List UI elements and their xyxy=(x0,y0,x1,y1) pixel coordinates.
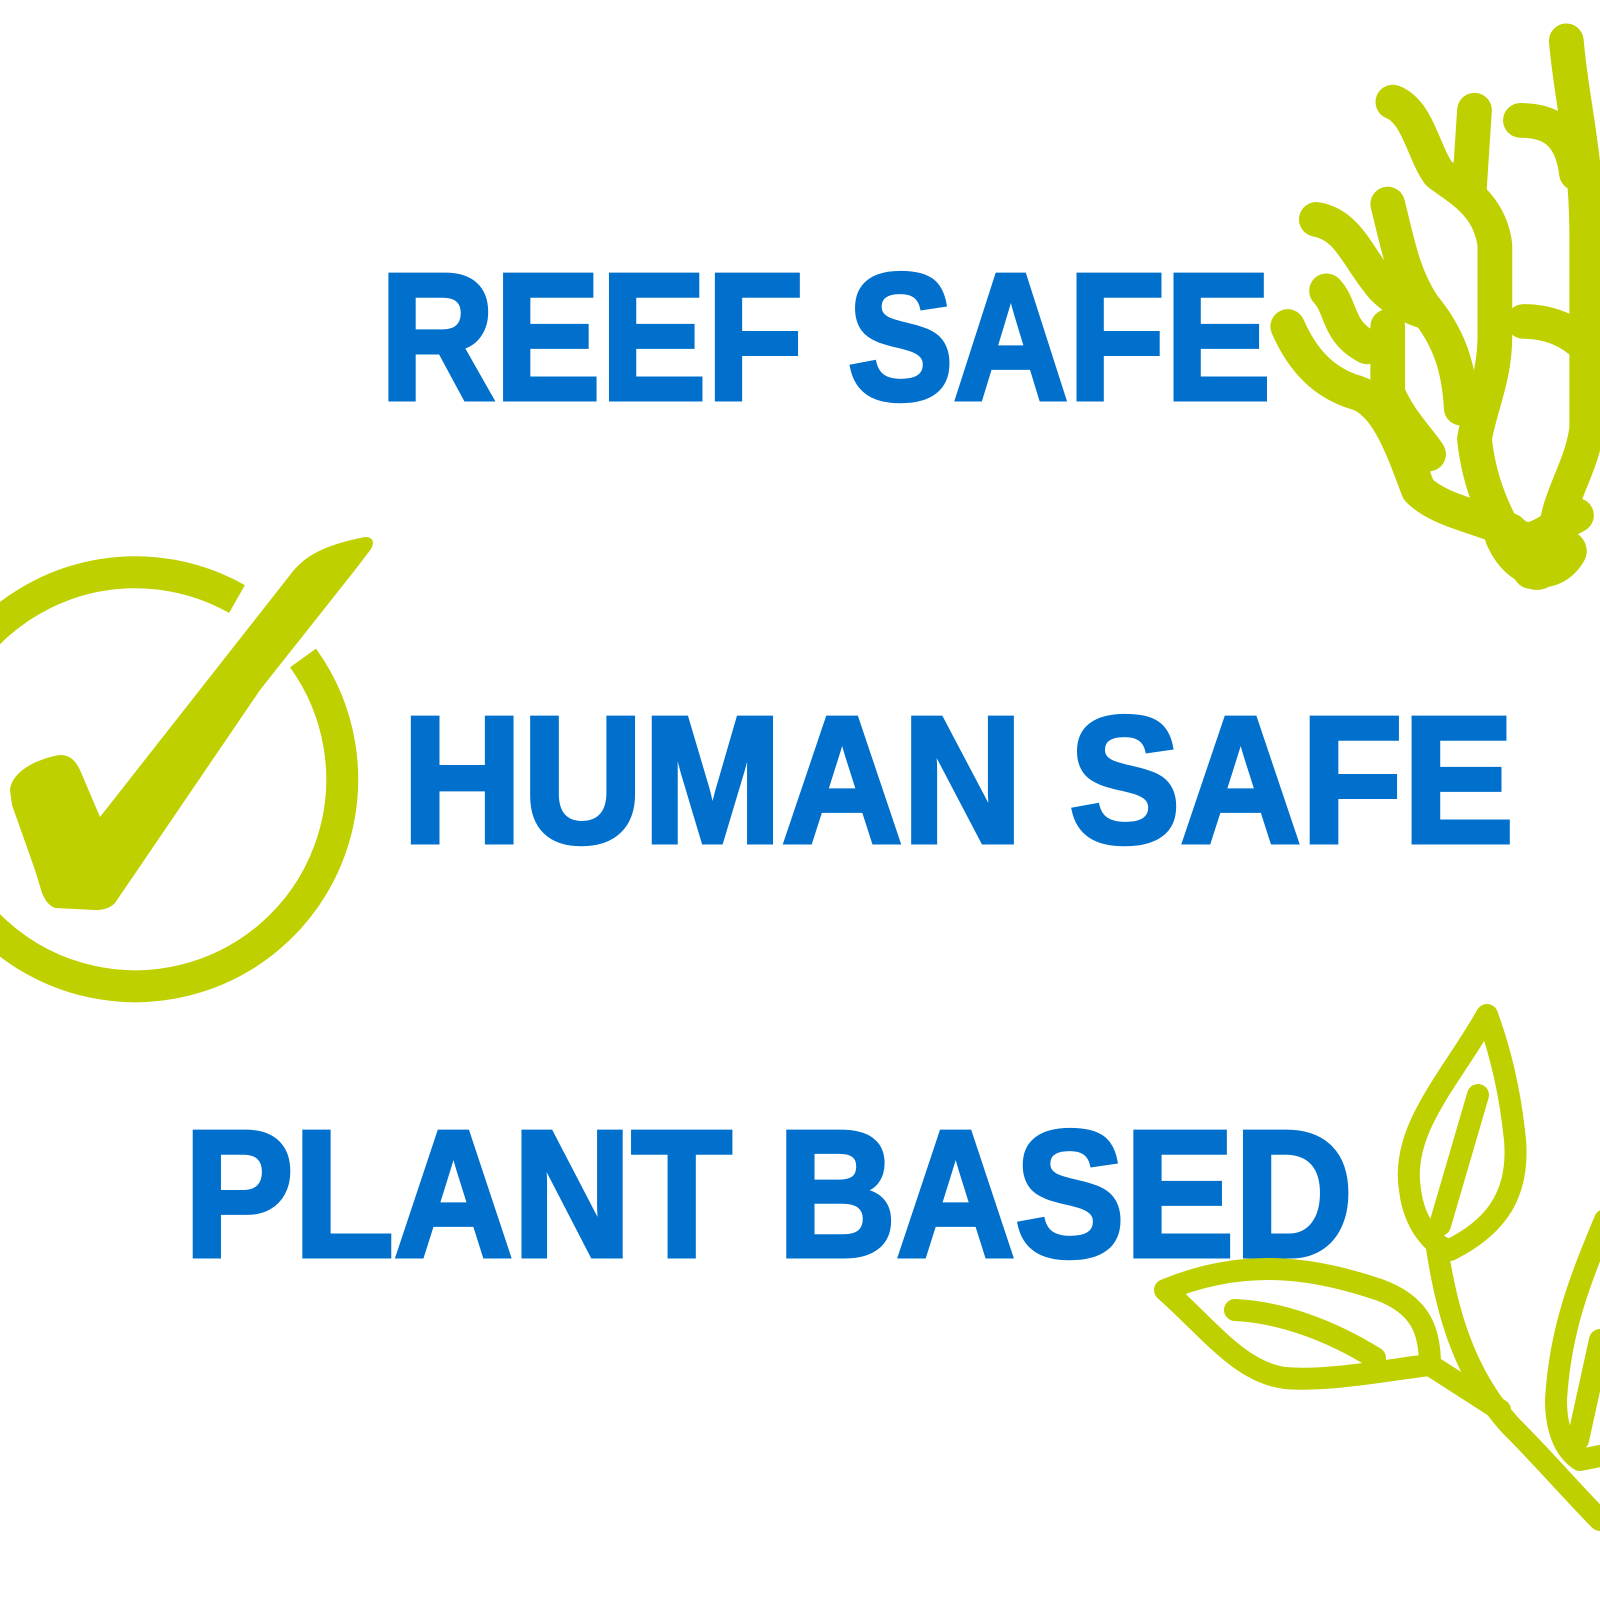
upper leaf xyxy=(1409,1015,1516,1250)
upper leaf vein xyxy=(1440,1095,1478,1225)
heading: PLANT BASED: PLANT BASED xyxy=(184,1094,1353,1295)
icon: check in circle xyxy=(0,537,373,986)
left leaf xyxy=(1165,1269,1500,1410)
heading: HUMAN SAFE: HUMAN SAFE xyxy=(402,680,1514,881)
right partial leaf xyxy=(1556,1220,1600,1460)
heading: REEF SAFE: REEF SAFE xyxy=(380,237,1271,438)
stem xyxy=(1437,1248,1600,1520)
icon: seaweed xyxy=(1288,41,1587,572)
left leaf vein xyxy=(1235,1310,1375,1358)
icon: leaves xyxy=(1165,1015,1600,1520)
